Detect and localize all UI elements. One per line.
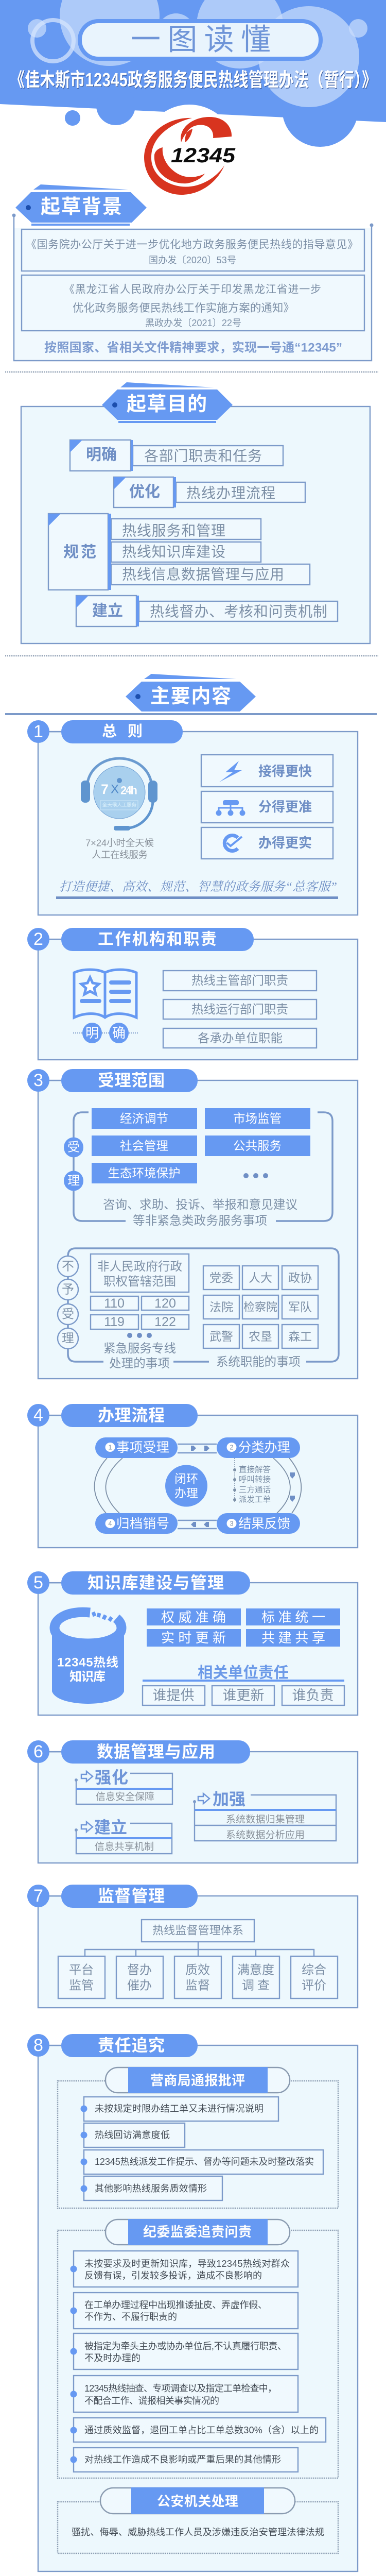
- step pills: 事项受理: [116, 1440, 169, 1455]
- related unit responsibilities: [143, 1664, 344, 1705]
- badge: not accepted: [58, 1256, 78, 1349]
- related unit responsibilities: 谁更新: [222, 1688, 265, 1703]
- step pills: 归档销号: [116, 1517, 169, 1531]
- accepted bracket: [64, 1112, 332, 1221]
- other system functions grid: 检察院: [243, 1300, 277, 1314]
- quality blocks: 实时更新: [161, 1630, 226, 1646]
- section heading 8: 责任追究: [98, 2036, 165, 2055]
- badge: not accepted: 受: [62, 1308, 74, 1321]
- step pills: 分类办理: [238, 1440, 290, 1455]
- not accepted bracket: [58, 1248, 339, 1362]
- accountability item 6: 对热线工作造成不良影响或严重后果的其他情形: [84, 2454, 281, 2465]
- accepted categories: 经济调节: [120, 1112, 168, 1125]
- item: establish: 建立: [92, 603, 123, 619]
- section heading 5: 5: [33, 1573, 43, 1592]
- document box: heilongjiang province: 黑政办发〔2021〕22号: [145, 318, 241, 328]
- duty boxes: 热线主管部门职责: [191, 974, 288, 987]
- item: optimize: [114, 477, 305, 507]
- accountability item 3: 不及时办理的: [84, 2353, 141, 2363]
- section heading 7: 7: [33, 1886, 43, 1906]
- accountability item 1: 反馈有误，引发较多投诉，造成不良影响的: [84, 2270, 262, 2281]
- org tree root: [85, 1920, 314, 1956]
- closed loop center: 办理: [174, 1486, 198, 1500]
- caption: 7x24 service: [85, 838, 154, 860]
- box: handled more solidly: [201, 827, 333, 859]
- step pills: 1: [108, 1444, 112, 1451]
- group: establish sharing: 信息共享机制: [95, 1841, 154, 1853]
- quality blocks: 标准统一: [261, 1609, 325, 1625]
- badge: accepted: [64, 1138, 83, 1191]
- quality blocks: 共建共享: [261, 1630, 325, 1646]
- item: define: 各部门职责和任务: [144, 448, 262, 464]
- other system functions grid: 农垦: [249, 1330, 272, 1343]
- closed loop center: [165, 1465, 207, 1506]
- group: discipline commission accountability: 纪委监委追责问责: [143, 2224, 252, 2240]
- panel: drafting background: [12, 184, 374, 361]
- group: enhance data: 加强: [213, 1790, 245, 1808]
- box: routed more accurately: [201, 791, 333, 823]
- group: establish sharing: [75, 1818, 172, 1854]
- quality blocks: 权威准确: [161, 1609, 226, 1625]
- other system functions grid: [203, 1266, 318, 1368]
- group: public security handling: 公安机关处理: [157, 2494, 238, 2509]
- main title badge: 一图读懂: [131, 23, 271, 57]
- section heading 3: 3: [33, 1071, 43, 1090]
- section heading 4: 4: [33, 1405, 43, 1425]
- non-government jurisdiction and emergency lines: 处理的事项: [109, 1357, 170, 1370]
- accepted categories: [92, 1108, 310, 1183]
- section heading 3: 受理范围: [98, 1071, 165, 1090]
- badge: not accepted: 不: [62, 1259, 74, 1274]
- section heading 3: [27, 1069, 198, 1092]
- duty boxes: 各承办单位职能: [198, 1031, 283, 1045]
- item: standardize: 热线知识库建设: [122, 544, 225, 560]
- accepted description: 咨询、求助、投诉、举报和意见建议: [103, 1198, 297, 1211]
- step pills: 结果反馈: [238, 1517, 290, 1531]
- group: business bureau criticism: [58, 2067, 338, 2208]
- icon: headset 7x24: [81, 758, 157, 831]
- accepted categories: 公共服务: [233, 1139, 282, 1153]
- group: strengthen security: 信息安全保障: [96, 1791, 154, 1802]
- supervision branches: 平台: [69, 1963, 94, 1977]
- box: routed more accurately: 分得更准: [258, 799, 312, 815]
- document box: state council: [22, 229, 364, 271]
- icon: knowledge base cylinder: 知识库: [69, 1670, 106, 1684]
- other system functions grid: 党委: [209, 1271, 233, 1284]
- group: business bureau criticism: 营商局通报批评: [150, 2073, 245, 2088]
- step pills: 2: [230, 1444, 234, 1451]
- panel 7: supervision: [27, 1885, 358, 2008]
- accepted description: 等非紧急类政务服务事项: [133, 1214, 267, 1227]
- document box: state council: 国办发〔2020〕53号: [149, 255, 236, 265]
- accountability item 5: 通过质效监督，退回工单占比工单总数30%（含）以上的: [84, 2425, 319, 2435]
- section heading 6: 6: [33, 1742, 43, 1761]
- heading: drafting background: [15, 184, 147, 226]
- group: public security handling: [58, 2487, 338, 2553]
- group: discipline commission accountability: [58, 2219, 338, 2478]
- supervision branches: 质效: [185, 1963, 210, 1977]
- handling methods list: [233, 1458, 271, 1504]
- non-government jurisdiction and emergency lines: 紧急服务专线: [103, 1342, 176, 1355]
- accountability item 4: [70, 2376, 298, 2412]
- slogan: [56, 880, 338, 899]
- panel 6: data management: [27, 1740, 358, 1863]
- heading: main content: 主要内容: [150, 686, 231, 707]
- non-government jurisdiction and emergency lines: 122: [154, 1315, 176, 1329]
- other system functions grid: 法院: [209, 1300, 233, 1314]
- related unit responsibilities: 谁提供: [152, 1688, 195, 1703]
- section heading 6: 数据管理与应用: [97, 1742, 215, 1761]
- group: establish sharing: 建立: [94, 1818, 127, 1837]
- section heading 2: 2: [33, 929, 43, 949]
- closed loop center: 闭环: [174, 1472, 198, 1485]
- box: answered faster: 接得更快: [258, 764, 312, 779]
- quality blocks: [147, 1608, 340, 1647]
- group: enhance data: [193, 1790, 336, 1841]
- group: enhance data: 系统数据归集管理: [226, 1814, 305, 1825]
- item: optimize: 优化: [129, 483, 160, 501]
- arrows: [191, 1446, 295, 1527]
- criticism item 2: [80, 2123, 185, 2147]
- handling methods list: 直接解答: [239, 1465, 271, 1475]
- accountability item 1: 未按要求及时更新知识库，导致12345热线对群众: [84, 2259, 290, 2269]
- icon: 12345 hotline logo: [144, 117, 236, 195]
- document box: state council: 《国务院办公厅关于进一步优化地方政务服务便民热线的指导意见》: [26, 239, 358, 250]
- document box: heilongjiang province: 《黑龙江省人民政府办公厅关于印发黑龙江省进一步: [64, 283, 321, 296]
- accountability item 4: 不配合工作、谎报相关事实情况的: [84, 2396, 219, 2406]
- section heading 5: [27, 1571, 250, 1595]
- section heading 1: 总 则: [102, 723, 143, 740]
- item: define: [70, 440, 283, 471]
- section heading 4: [27, 1404, 198, 1427]
- main title badge: [80, 21, 321, 59]
- group: public security handling: 骚扰、侮辱、威胁热线工作人员及涉嫌违反治安管理法律法规: [72, 2527, 324, 2537]
- supervision branches: 督办: [127, 1963, 152, 1977]
- section heading 5: 知识库建设与管理: [87, 1573, 224, 1592]
- icon: headset 7x24: X: [111, 782, 119, 796]
- item: standardize: [48, 514, 310, 590]
- org tree root: 热线监督管理体系: [152, 1924, 243, 1937]
- badges: define: 确: [112, 1025, 126, 1041]
- other system functions grid: 系统职能的事项: [216, 1355, 301, 1368]
- accountability item 2: 在工单办理过程中出现推诿扯皮、弄虚作假、: [84, 2300, 267, 2310]
- criticism item 4: 其他影响热线服务质效情形: [95, 2183, 207, 2194]
- group: strengthen security: 强化: [95, 1768, 128, 1787]
- item: optimize: 热线办理流程: [186, 485, 275, 501]
- handling methods list: 派发工单: [239, 1495, 271, 1504]
- non-government jurisdiction and emergency lines: 职权管辖范围: [103, 1275, 176, 1288]
- subtitle: 《佳木斯市12345政务服务便民热线管理办法（暂行）》: [10, 70, 377, 91]
- supervision branches: 监管: [69, 1978, 94, 1993]
- accepted categories: 社会管理: [120, 1139, 168, 1153]
- badge: accepted: 理: [67, 1174, 80, 1188]
- item: standardize: 热线服务和管理: [122, 522, 225, 539]
- badge: not accepted: 理: [62, 1331, 74, 1346]
- non-government jurisdiction and emergency lines: 119: [104, 1315, 125, 1329]
- supervision branches: 监督: [185, 1978, 210, 1993]
- accountability item 3: [70, 2333, 298, 2369]
- criticism item 4: [80, 2176, 222, 2200]
- related unit responsibilities: 谁负责: [292, 1688, 334, 1703]
- background statement: 按照国家、省相关文件精神要求，实现一号通“12345”: [44, 340, 342, 354]
- item: establish: 热线督办、考核和问责机制: [150, 604, 327, 619]
- section heading 7: 监督管理: [98, 1887, 165, 1905]
- criticism item 3: [80, 2150, 323, 2174]
- other system functions grid: 军队: [288, 1300, 312, 1314]
- accountability item 5: [70, 2418, 326, 2442]
- accountability item 4: 12345热线抽查、专项调查以及指定工单检查中，: [84, 2383, 277, 2394]
- icon: headset 7x24: 全天候人工服务: [102, 802, 137, 808]
- badges: define: 明: [85, 1025, 99, 1041]
- document box: heilongjiang province: [22, 275, 364, 331]
- accountability item 2: [70, 2293, 298, 2329]
- section heading 1: [27, 720, 183, 743]
- slogan: 打造便捷、高效、规范、智慧的政务服务“总客服”: [59, 880, 337, 894]
- box: answered faster: [201, 755, 333, 787]
- other system functions grid: 政协: [288, 1271, 312, 1284]
- loop connectors: [94, 1444, 301, 1529]
- other system functions grid: 森工: [288, 1330, 312, 1343]
- icon: open book: [74, 970, 136, 1018]
- icon: knowledge base cylinder: [52, 1612, 124, 1704]
- caption: 7x24 service: 7×24小时全天候: [85, 838, 154, 848]
- handling methods list: 呼叫转接: [239, 1475, 271, 1484]
- section heading 1: 1: [33, 722, 43, 741]
- group: strengthen security: [75, 1768, 172, 1804]
- panel 5: knowledge base: [27, 1571, 358, 1715]
- box: handled more solidly: 办得更实: [258, 835, 312, 851]
- icon: headset 7x24: 7: [101, 782, 109, 797]
- badge: not accepted: 予: [62, 1283, 74, 1296]
- badges: define: [73, 1023, 138, 1043]
- section heading 8: [27, 2034, 198, 2057]
- caption: 7x24 service: 人工在线服务: [92, 849, 148, 860]
- icon: headset 7x24: 24h: [120, 784, 137, 796]
- duty boxes: 热线运行部门职责: [191, 1003, 288, 1016]
- supervision branches: 满意度: [237, 1963, 274, 1977]
- panel 2: organization and duties: [27, 928, 358, 1060]
- supervision branches: [58, 1956, 338, 1998]
- non-government jurisdiction and emergency lines: 非人民政府行政: [97, 1260, 182, 1273]
- heading: drafting background: 起草背景: [41, 196, 122, 218]
- supervision branches: 评价: [302, 1978, 326, 1993]
- panel 8: accountability: [27, 2034, 358, 2571]
- section heading 4: 办理流程: [98, 1406, 165, 1425]
- section heading 8: 8: [33, 2036, 43, 2055]
- non-government jurisdiction and emergency lines: 110: [104, 1296, 125, 1311]
- item: standardize: 规范: [63, 544, 96, 561]
- duty boxes: [163, 971, 317, 1048]
- supervision branches: 综合: [302, 1963, 326, 1977]
- step pills: 3: [230, 1520, 234, 1527]
- panel: drafting purpose: [21, 382, 370, 643]
- criticism item 1: [80, 2097, 278, 2121]
- heading: main content: [5, 674, 377, 715]
- step pills: [95, 1437, 300, 1534]
- other system functions grid: 武警: [209, 1330, 233, 1343]
- icon: 12345 hotline logo: 12345: [171, 144, 236, 167]
- related unit responsibilities: 相关单位责任: [198, 1664, 289, 1682]
- accountability item 2: 不作为、不履行职责的: [84, 2312, 177, 2322]
- criticism item 2: 热线回访满意度低: [95, 2130, 170, 2140]
- accountability item 1: [70, 2251, 298, 2287]
- section heading 2: 工作机构和职责: [98, 930, 217, 948]
- heading: drafting purpose: [102, 382, 233, 423]
- accountability item 3: 被指定为牵头主办或协办单位后,不认真履行职责、: [84, 2341, 287, 2351]
- section heading 7: [27, 1885, 198, 1908]
- document box: heilongjiang province: 优化政务服务便民热线工作实施方案的通知》: [73, 302, 294, 314]
- supervision branches: 催办: [127, 1978, 152, 1993]
- section heading 6: [27, 1740, 250, 1764]
- other system functions grid: 人大: [249, 1271, 272, 1284]
- panel 1: general principles: [27, 720, 358, 915]
- group: enhance data: 系统数据分析应用: [226, 1829, 305, 1840]
- panel 4: handling process: [27, 1404, 358, 1548]
- item: standardize: 热线信息数据管理与应用: [122, 567, 284, 582]
- item: define: 明确: [86, 446, 117, 464]
- header banner: [0, 0, 386, 197]
- criticism item 1: 未按规定时限办结工单又未进行情况说明: [95, 2104, 264, 2114]
- handling methods list: 三方通话: [239, 1485, 271, 1494]
- heading: drafting purpose: 起草目的: [127, 394, 207, 415]
- accepted categories: 生态环境保护: [108, 1166, 180, 1180]
- icon: knowledge base cylinder: 12345热线: [57, 1656, 118, 1669]
- non-government jurisdiction and emergency lines: 120: [154, 1296, 176, 1311]
- badge: accepted: 受: [67, 1141, 80, 1154]
- panel 3: scope of acceptance: [27, 1069, 358, 1379]
- criticism item 3: 12345热线派发工作提示、督办等问题未及时整改落实: [95, 2157, 314, 2167]
- non-government jurisdiction and emergency lines: [91, 1254, 189, 1370]
- accepted categories: 市场监管: [233, 1112, 282, 1125]
- supervision branches: 调查: [242, 1978, 270, 1993]
- accountability item 6: [70, 2448, 298, 2472]
- item: establish: [76, 596, 338, 626]
- accepted description: [103, 1198, 297, 1227]
- step pills: 4: [108, 1520, 112, 1527]
- section heading 2: [27, 928, 254, 951]
